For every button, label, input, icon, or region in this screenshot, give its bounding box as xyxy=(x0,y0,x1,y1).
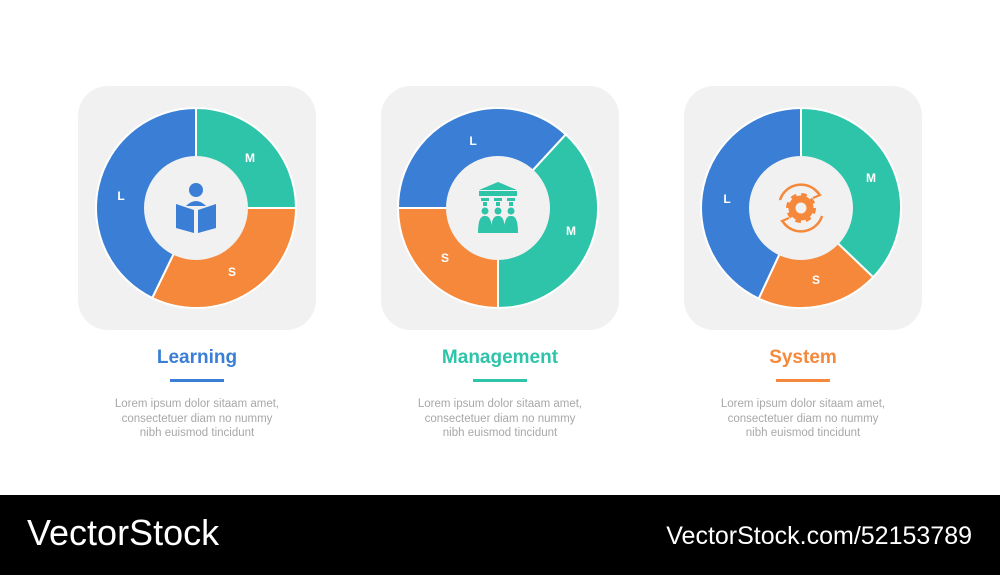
donut chart management: S xyxy=(441,251,449,265)
donut chart system: M xyxy=(866,171,876,185)
donut chart system xyxy=(701,108,901,308)
panel: learning chart xyxy=(78,86,316,330)
donut chart system: L xyxy=(723,192,731,206)
icon: institution with people xyxy=(478,182,518,233)
footer logo text: VectorStock xyxy=(27,512,219,553)
text: learning body: Lorem ipsum dolor sitaam amet, xyxy=(115,398,279,410)
donut chart learning xyxy=(96,108,296,308)
text: management body: consectetuer diam no nummy xyxy=(425,412,575,424)
icon: reader with book xyxy=(176,183,216,233)
text: management body xyxy=(418,398,582,439)
text: system body: nibh euismod tincidunt xyxy=(746,427,860,439)
donut chart management: L xyxy=(469,134,477,148)
text: management body: nibh euismod tincidunt xyxy=(443,427,557,439)
panel: management chart xyxy=(381,86,619,330)
text: system body: Lorem ipsum dolor sitaam amet, xyxy=(721,398,885,410)
donut chart management: M xyxy=(566,224,576,238)
icon: gear with cycle arrows xyxy=(780,185,822,231)
panel: system chart xyxy=(684,86,922,330)
heading: System: System xyxy=(769,347,837,368)
footer bar xyxy=(0,495,1000,575)
heading: Management: Management xyxy=(442,347,558,368)
donut chart system: S xyxy=(812,273,820,287)
text: learning body xyxy=(115,398,279,439)
text: system body: consectetuer diam no nummy xyxy=(728,412,878,424)
donut chart learning: M xyxy=(245,151,255,165)
text: system body xyxy=(721,398,885,439)
footer url: VectorStock.com/52153789 xyxy=(666,522,972,550)
text: learning body: nibh euismod tincidunt xyxy=(140,427,254,439)
heading: Learning: Learning xyxy=(157,347,237,368)
donut chart management xyxy=(398,108,598,308)
donut chart learning: L xyxy=(117,189,125,203)
text: learning body: consectetuer diam no nummy xyxy=(122,412,272,424)
donut chart learning: S xyxy=(228,265,236,279)
text: management body: Lorem ipsum dolor sitaam amet, xyxy=(418,398,582,410)
